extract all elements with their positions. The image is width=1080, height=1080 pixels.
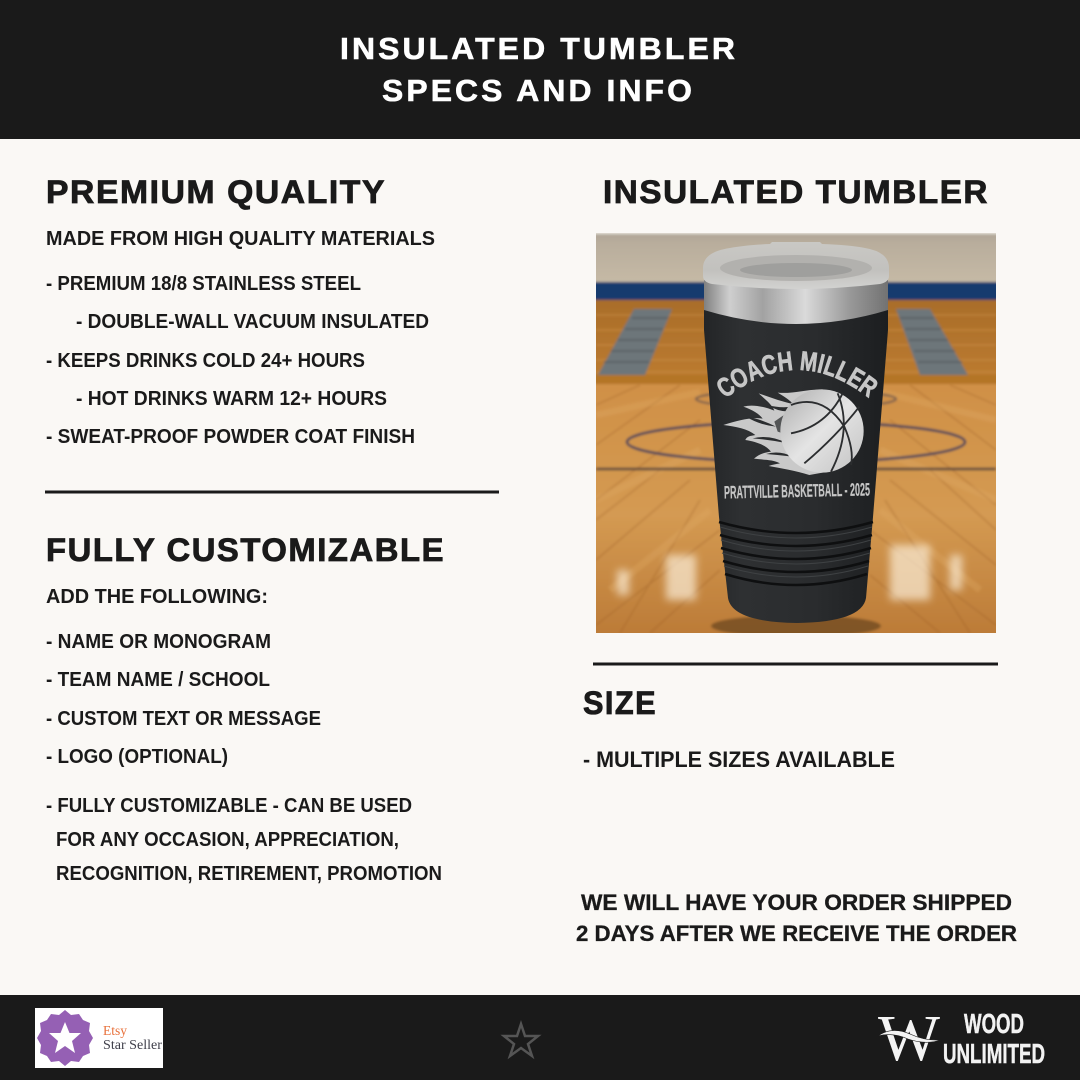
customization options list [46, 586, 321, 768]
icon: purple seal with star [37, 1010, 93, 1066]
premium quality feature list: - PREMIUM 18/8 STAINLESS STEEL [46, 273, 361, 295]
engraved caption: PRATTVILLE BASKETBALL - 2025 [724, 479, 870, 503]
court background [590, 228, 1002, 638]
logo wordmark: WOOD [964, 1008, 1024, 1039]
engraved name: COACH MILLER [717, 351, 878, 398]
customization note [46, 795, 442, 885]
banner title [340, 31, 738, 108]
customization options list: ADD THE FOLLOWING: [46, 586, 268, 608]
header banner [0, 0, 1080, 139]
customization note: RECOGNITION, RETIREMENT, PROMOTION [56, 863, 442, 885]
premium quality feature list: - SWEAT-PROOF POWDER COAT FINISH [46, 426, 415, 448]
panel: fully customizable [46, 532, 445, 885]
engraved flaming basketball [723, 389, 864, 475]
panel: size [583, 685, 895, 772]
etsy star seller badge [35, 1008, 163, 1068]
glare [617, 545, 962, 600]
customization options list: - CUSTOM TEXT OR MESSAGE [46, 708, 321, 730]
size note: - MULTIPLE SIZES AVAILABLE [583, 747, 895, 772]
tumbler [703, 242, 889, 623]
etsy star seller badge: Star Seller [103, 1038, 162, 1053]
customization options list: - LOGO (OPTIONAL) [46, 746, 228, 768]
tumbler body [704, 300, 888, 623]
premium quality feature list: MADE FROM HIGH QUALITY MATERIALS [46, 228, 435, 250]
logo wordmark [943, 1008, 1045, 1069]
heading: fully customizable: FULLY CUSTOMIZABLE [46, 532, 445, 568]
heading: insulated tumbler: INSULATED TUMBLER [603, 174, 989, 210]
premium quality feature list: - HOT DRINKS WARM 12+ HOURS [76, 388, 387, 410]
icon: outlined star [504, 1024, 538, 1056]
product photo: engraved tumbler on basketball court [596, 233, 996, 633]
etsy star seller badge: Etsy [103, 1024, 127, 1039]
court lines [627, 422, 965, 462]
ball [780, 389, 864, 473]
customization options list: - TEAM NAME / SCHOOL [46, 669, 270, 691]
premium quality feature list: - DOUBLE-WALL VACUUM INSULATED [76, 311, 429, 333]
heading: size: SIZE [583, 685, 657, 721]
wood unlimited logo [878, 1002, 1045, 1075]
heading: premium quality: PREMIUM QUALITY [46, 174, 386, 210]
customization options list: - NAME OR MONOGRAM [46, 631, 271, 653]
shipping notice [576, 890, 1017, 946]
premium quality feature list: - KEEPS DRINKS COLD 24+ HOURS [46, 350, 365, 372]
floor planks [597, 386, 995, 590]
panel: premium quality [46, 174, 435, 448]
shipping notice: WE WILL HAVE YOUR ORDER SHIPPED [581, 890, 1012, 915]
clear lid [703, 242, 889, 289]
shipping notice: 2 DAYS AFTER WE RECEIVE THE ORDER [576, 921, 1017, 946]
logo mark W: W [878, 1002, 941, 1075]
customization note: FOR ANY OCCASION, APPRECIATION, [56, 829, 399, 851]
flames [723, 389, 823, 475]
customization note: - FULLY CUSTOMIZABLE - CAN BE USED [46, 795, 412, 817]
premium quality feature list [46, 228, 435, 448]
ribbed base [719, 522, 873, 585]
footer bar [0, 995, 1080, 1080]
steel rim [704, 280, 888, 324]
banner title: SPECS AND INFO [382, 73, 695, 108]
banner title: INSULATED TUMBLER [340, 31, 738, 66]
